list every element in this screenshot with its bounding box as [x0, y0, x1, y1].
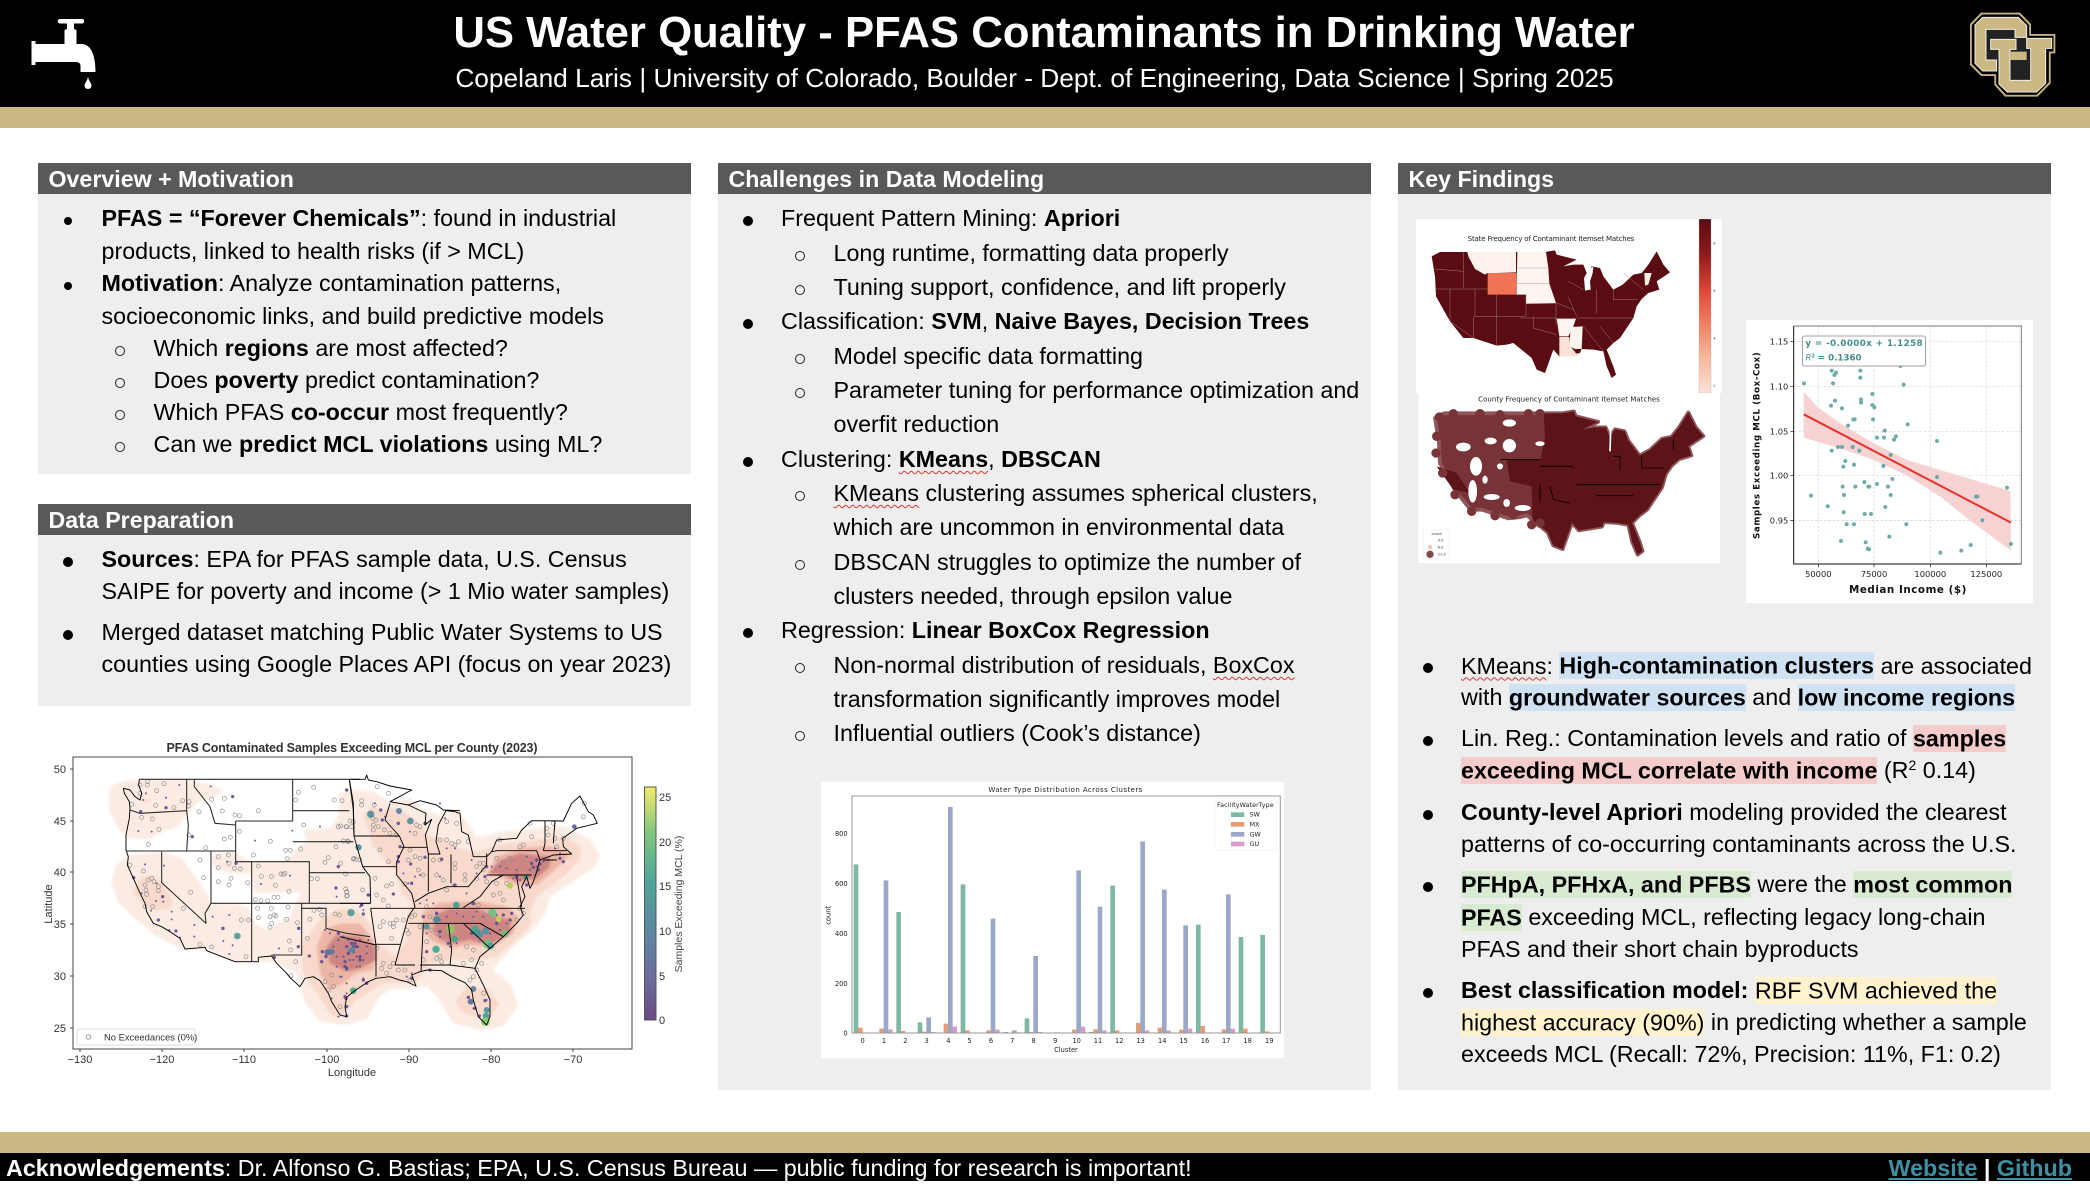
axis ticks and labels: 30 [54, 971, 66, 983]
legend: facility water type: GU [1249, 841, 1259, 848]
chart: income regression scatter: 1.05 [1769, 426, 1788, 436]
legend: count: 0.0 [1438, 539, 1444, 543]
chart: water type distribution across clusters: 10 [1072, 1037, 1081, 1045]
text block: findings list: with groundwater sources and low income regions [1461, 684, 2015, 710]
text block: findings list: PFAS and their short chain byproducts [1461, 936, 1859, 962]
colorbar: 20 [659, 837, 671, 849]
equation callout [1802, 336, 1925, 366]
heading: Challenges in Data Modeling [718, 163, 1371, 194]
chart: water type distribution across clusters: 7 [1010, 1037, 1014, 1045]
chart: income regression scatter: 50000 [1805, 569, 1831, 579]
text block: overview bullets: socioeconomic links, and build predictive models [102, 303, 604, 329]
panel: Key Findings [1398, 163, 2051, 1090]
chart: water type distribution across clusters: 1 [882, 1037, 886, 1045]
county map gaps [1456, 419, 1545, 511]
text block: challenges list: Tuning support, confidence, and lift properly [834, 274, 1286, 300]
chart: income regression scatter [1746, 320, 2033, 603]
chart: water type distribution across clusters: 15 [1179, 1037, 1188, 1045]
text block: challenges list: clusters needed, through epsilon value [834, 583, 1232, 609]
legend: count: 6.0 [1438, 545, 1444, 549]
chart: water type distribution across clusters: 0 [843, 1029, 847, 1037]
colorbar: Samples Exceeding MCL (%) [673, 836, 685, 972]
large coloured exceedance dots [234, 808, 577, 1026]
text block: challenges list: Influential outliers (Cook’s distance) [834, 720, 1201, 746]
axis ticks and labels: 45 [54, 816, 66, 828]
axis ticks and labels: −100 [315, 1054, 339, 1066]
axis ticks and labels: 25 [54, 1023, 66, 1035]
text block: findings list: County-level Apriori modeling provided the clearest [1461, 799, 2007, 825]
chart: water type distribution across clusters: 14 [1158, 1037, 1166, 1045]
text block: challenges list: Non-normal distribution of residuals, BoxCox [834, 652, 1294, 678]
icon: CU logo [1970, 12, 2056, 97]
colorbar: 10 [659, 926, 671, 938]
icon: water faucet [32, 19, 96, 89]
text block: overview bullets: Does poverty predict contamination? [154, 367, 539, 393]
chart: water type distribution across clusters: 19 [1265, 1037, 1273, 1045]
chart: water type distribution across clusters: 800 [835, 830, 847, 838]
panel: Challenges in Data Modeling [718, 163, 1371, 1090]
text block: challenges list: Model specific data formatting [834, 343, 1143, 369]
text block: challenges list: transformation significantly improves model [834, 686, 1280, 712]
text block: challenges list: Frequent Pattern Mining: Apriori [781, 205, 1120, 231]
state frequency map: 8 [1713, 241, 1715, 245]
chart: water type distribution across clusters: 9 [1053, 1037, 1057, 1045]
subtitle: Copeland Laris | University of Colorado, Boulder - Dept. of Engineering, Data Science | Spring 2025 [455, 63, 1614, 93]
heading: Data Preparation: Data Preparation [48, 507, 234, 533]
chart: water type distribution across clusters: Cluster [1054, 1046, 1078, 1054]
chart: water type distribution across clusters: 13 [1136, 1037, 1145, 1045]
scatter points [1802, 364, 2013, 555]
chart: water type distribution across clusters: 8 [1031, 1037, 1035, 1045]
text block: challenges list: which are uncommon in environmental data [834, 514, 1284, 540]
bars: GW [886, 807, 1228, 1033]
panel: Overview + Motivation [38, 163, 691, 474]
state frequency map: 4 [1713, 336, 1715, 340]
state borders [123, 775, 597, 1025]
text block: findings list: exceeds MCL (Recall: 72%, Precision: 11%, F1: 0.2) [1461, 1041, 2001, 1067]
colorbar: 15 [659, 881, 671, 893]
text block: overview bullets: Which PFAS co-occur most frequently? [154, 399, 568, 425]
axis ticks and labels: −130 [68, 1054, 92, 1066]
text block: overview bullets: Motivation: Analyze contamination patterns, [102, 270, 561, 296]
axis ticks and labels [43, 764, 582, 1079]
text block: findings list: highest accuracy (90%) in predicting whether a sample [1461, 1009, 2027, 1035]
charts: state and county frequency maps [1416, 219, 1722, 563]
equation callout: y = -0.0000x + 1.1258 [1805, 339, 1922, 349]
axis ticks and labels: −120 [150, 1054, 174, 1066]
axis ticks and labels: Longitude [328, 1067, 376, 1079]
chart title: PFAS Contaminated Samples Exceeding MCL per County (2023) [166, 741, 538, 755]
chart: water type distribution across clusters: 6 [989, 1037, 993, 1045]
chart: income regression scatter: 1.10 [1769, 382, 1788, 392]
chart: water type distribution across clusters: 17 [1222, 1037, 1230, 1045]
text block: data sources: SAIPE for poverty and income (> 1 Mio water samples) [102, 578, 669, 604]
text block: findings list: PFHpA, PFHxA, and PFBS were the most common [1461, 871, 2012, 897]
chart: water type distribution across clusters: 2 [903, 1037, 907, 1045]
text block: findings list: patterns of co-occurring contaminants across the U.S. [1461, 831, 2016, 857]
legend: facility water type: FacilityWaterType [1217, 802, 1273, 809]
colorbar: 0 [659, 1015, 665, 1027]
chart: water type distribution across clusters: 11 [1093, 1037, 1102, 1045]
text block: challenges list: Long runtime, formatting data properly [834, 240, 1228, 266]
chart: income regression scatter: Median Income ($) [1849, 584, 1966, 596]
chart: income regression scatter: 0.95 [1769, 516, 1788, 526]
text block: overview bullets [64, 205, 616, 457]
county frequency map: County Frequency of Contaminant Itemset Matches [1478, 396, 1660, 404]
chart: income regression scatter: 100000 [1914, 569, 1946, 579]
bars: SW [856, 864, 1262, 1033]
text block: overview bullets: products, linked to health risks (if > MCL) [102, 238, 524, 264]
axis ticks and labels: −90 [400, 1054, 418, 1066]
equation callout: 2 [1811, 353, 1815, 359]
purple exceedance dots [134, 785, 563, 1017]
links: website and github: Website | Github [1888, 1155, 2072, 1181]
state frequency map [1416, 219, 1722, 393]
legend: facility water type: GW [1249, 831, 1261, 838]
chart: water type distribution across clusters: 4 [946, 1037, 950, 1045]
text block: findings list: PFAS exceeding MCL, reflecting legacy long-chain [1461, 904, 1985, 930]
text block: data sources: Merged dataset matching Public Water Systems to US [102, 619, 663, 645]
text block: challenges list: DBSCAN struggles to optimize the number of [834, 549, 1301, 575]
text block: data sources [63, 546, 671, 677]
legend: facility water type [1214, 798, 1277, 850]
text block: challenges list: KMeans clustering assumes spherical clusters, [834, 480, 1318, 506]
state frequency map: 6 [1713, 289, 1715, 293]
text block: challenges list: Clustering: KMeans, DBSCAN [781, 446, 1101, 472]
legend: facility water type: MX [1249, 821, 1260, 828]
text block: overview bullets: Can we predict MCL violations using ML? [154, 431, 602, 457]
chart: water type distribution across clusters: 3 [924, 1037, 928, 1045]
chart: water type distribution across clusters: 200 [835, 980, 847, 988]
text block: challenges list [743, 205, 1359, 746]
acknowledgements: Acknowledgements: Dr. Alfonso G. Bastias; EPA, U.S. Census Bureau — public funding for research is important! [6, 1155, 1192, 1181]
title: US Water Quality - PFAS Contaminants in Drinking Water [453, 8, 1635, 57]
equation callout: R [1805, 354, 1811, 364]
colorbar: 25 [659, 792, 671, 804]
legend: count: count [1432, 532, 1442, 536]
chart: income regression scatter: 1.00 [1769, 471, 1788, 481]
axis ticks and labels: −80 [482, 1054, 500, 1066]
equation callout: = 0.1360 [1815, 354, 1861, 364]
text block: challenges list: Regression: Linear BoxCox Regression [781, 617, 1210, 643]
bars: GU [890, 1026, 1232, 1033]
text block: findings list: KMeans: High-contamination clusters are associated [1461, 652, 2032, 678]
text block: overview bullets: Which regions are most affected? [154, 335, 508, 361]
bars: MX [860, 1023, 1267, 1033]
legend: facility water type: SW [1249, 811, 1260, 818]
text block: findings list: Lin. Reg.: Contamination levels and ratio of samples [1461, 725, 2006, 751]
chart: PFAS exceedance map [43, 741, 685, 1079]
heading: Challenges in Data Modeling: Challenges in Data Modeling [728, 166, 1044, 192]
state frequency map: State Frequency of Contaminant Itemset Matches [1468, 235, 1635, 243]
chart: water type distribution across clusters: 400 [835, 930, 847, 938]
regression line [1803, 414, 2011, 523]
colorbar: 5 [659, 971, 665, 983]
chart: water type distribution across clusters: 600 [835, 880, 847, 888]
text block: data sources: counties using Google Places API (focus on year 2023) [102, 651, 671, 677]
chart: water type distribution across clusters: 0 [860, 1037, 864, 1045]
chart: income regression scatter: 75000 [1860, 569, 1887, 579]
text block: findings list: Best classification model: RBF SVM achieved the [1461, 977, 1997, 1003]
text block: data sources: Sources: EPA for PFAS sample data, U.S. Census [102, 546, 627, 572]
heading: Key Findings [1398, 163, 2051, 194]
chart: water type distribution across clusters: 16 [1200, 1037, 1209, 1045]
heading: Overview + Motivation: Overview + Motivation [48, 166, 294, 192]
state frequency map: 2 [1713, 384, 1715, 388]
chart: water type distribution across clusters [821, 782, 1284, 1058]
footer band [0, 1132, 2090, 1181]
heading: Overview + Motivation [38, 163, 691, 194]
chart: income regression scatter: 125000 [1970, 569, 2002, 579]
header band [0, 0, 2090, 128]
text block: challenges list: Classification: SVM, Naive Bayes, Decision Trees [781, 308, 1309, 334]
chart: water type distribution across clusters: 12 [1115, 1037, 1123, 1045]
text block: findings list [1423, 652, 2032, 1067]
axis ticks and labels: 40 [54, 867, 66, 879]
axis ticks and labels: 50 [54, 764, 66, 776]
chart: water type distribution across clusters: Water Type Distribution Across Clusters [988, 786, 1142, 794]
text block: challenges list: overfit reduction [834, 411, 999, 437]
colorbar [644, 787, 685, 1027]
text block: overview bullets: PFAS = “Forever Chemicals”: found in industrial [102, 205, 616, 231]
axis ticks and labels: 35 [54, 919, 66, 931]
text block: findings list: exceeding MCL correlate with income (R2 0.14) [1461, 757, 1976, 783]
county frequency map [1418, 393, 1720, 563]
axis ticks and labels: Latitude [43, 884, 55, 924]
legend: count: 21.0 [1438, 552, 1446, 556]
chart: water type distribution across clusters: 18 [1243, 1037, 1252, 1045]
panel: Data Preparation [38, 504, 691, 706]
legend: count [1423, 530, 1449, 558]
chart: income regression scatter: 1.15 [1769, 337, 1788, 347]
heading: Key Findings: Key Findings [1408, 166, 1554, 192]
chart: water type distribution across clusters: 5 [967, 1037, 971, 1045]
legend: no exceedances [77, 1029, 197, 1045]
axis ticks and labels: −70 [564, 1054, 582, 1066]
text block: challenges list: Parameter tuning for performance optimization and [834, 377, 1359, 403]
chart: water type distribution across clusters: count [824, 905, 832, 924]
legend: no exceedances: No Exceedances (0%) [104, 1032, 197, 1042]
heading: Data Preparation [38, 504, 691, 535]
axis ticks and labels: −110 [232, 1054, 256, 1066]
chart: income regression scatter: Samples Exceeding MCL (Box-Cox) [1752, 352, 1762, 539]
